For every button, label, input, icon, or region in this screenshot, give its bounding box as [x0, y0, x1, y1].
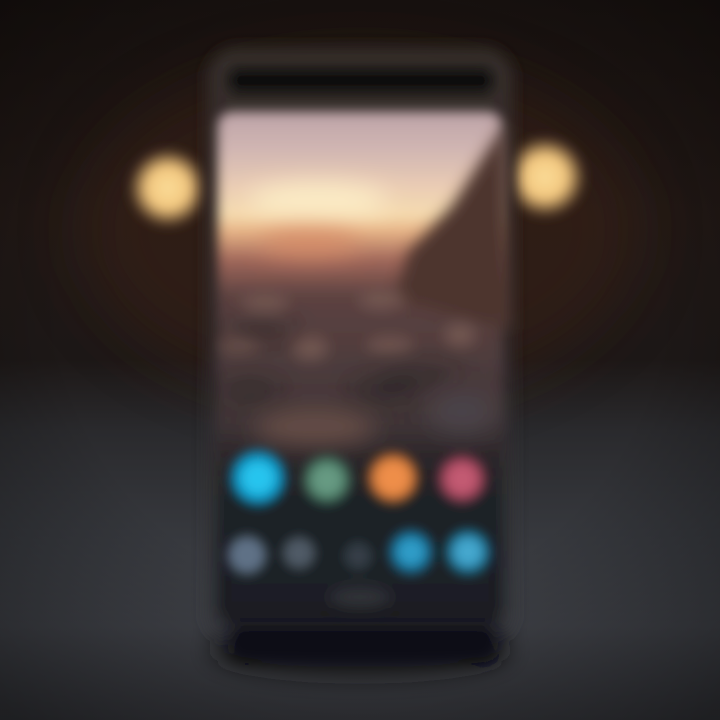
phone with wallpaper and app icons: [207, 48, 513, 676]
sun glow: [248, 182, 388, 218]
icon: small home indicator glow: [328, 585, 392, 609]
icon: cyan app: [446, 530, 490, 574]
town light patches: [220, 291, 476, 360]
mountain slope: [395, 122, 510, 330]
dark town patches: [220, 322, 460, 401]
icon: light blue app: [389, 530, 433, 574]
icon: pink app: [438, 455, 486, 503]
app icons row one: [231, 451, 486, 505]
icon: grey app: [283, 537, 315, 569]
phone bottom bar: [228, 622, 498, 662]
icon: left glowing light: [126, 146, 210, 230]
screen gradient: [218, 112, 502, 622]
phone top bar: [230, 69, 492, 92]
icon: dim app: [344, 542, 372, 570]
icon: green app: [303, 456, 351, 504]
icon: right glowing light: [502, 134, 588, 220]
icon: grey-blue app: [228, 536, 266, 574]
phone screen wallpaper: [218, 112, 510, 622]
app icons row two: [228, 530, 490, 574]
phone shadow: [210, 624, 510, 676]
icon: blue app: [231, 451, 285, 505]
horizon glow: [260, 229, 360, 257]
phone body: [207, 48, 513, 644]
dock backdrop arc: [253, 410, 377, 446]
icon: orange app: [368, 453, 418, 503]
